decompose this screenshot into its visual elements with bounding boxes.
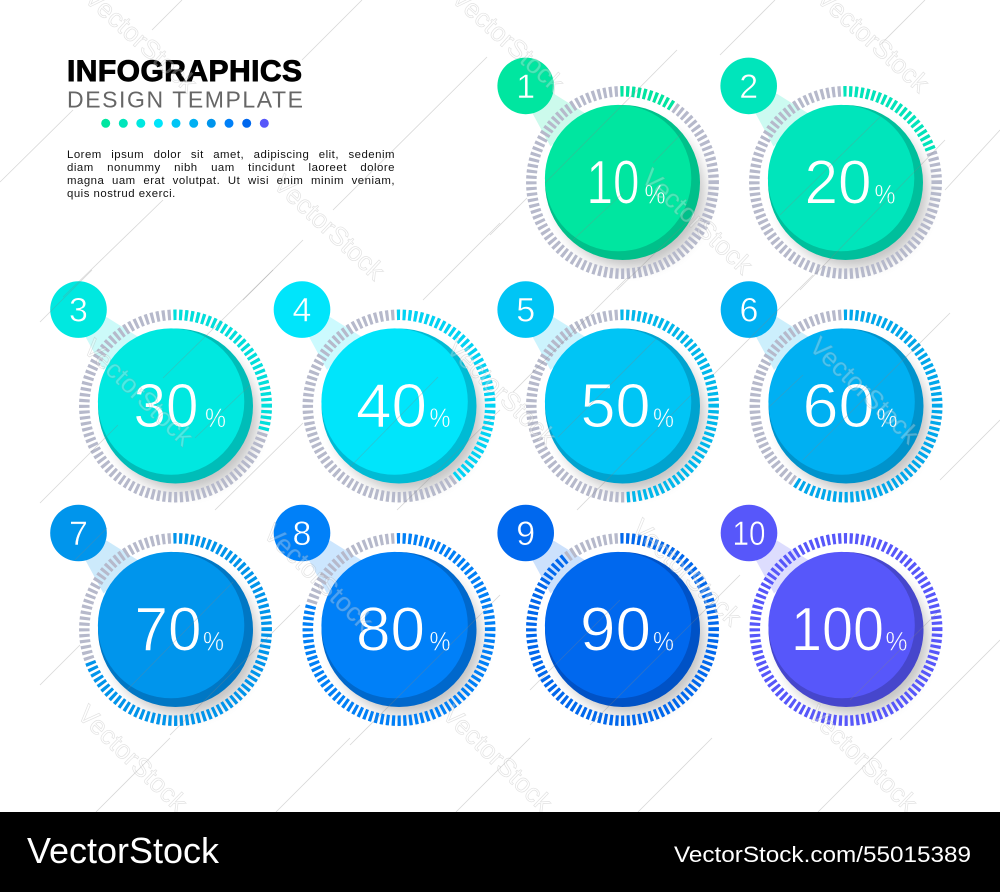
- panel: gauge 8, 80%: [274, 505, 490, 721]
- badge: 2: 2: [739, 68, 758, 106]
- value: 80%: 80: [356, 596, 425, 664]
- watermark text: VectorStock: [441, 333, 563, 452]
- badge: 8: 8: [293, 515, 311, 553]
- badge: 7: 7: [69, 515, 88, 553]
- panel: gauge 10, 100%: [721, 505, 937, 721]
- value: 10%: 10: [586, 148, 640, 218]
- badge: 9: 9: [516, 515, 535, 553]
- watermark text: VectorStock: [636, 162, 759, 281]
- colour dots row: [101, 119, 269, 128]
- panel: gauge 7, 70%: [50, 505, 267, 721]
- title: INFOGRAPHICS: INFOGRAPHICS: [67, 55, 302, 88]
- watermark text: VectorStock: [437, 699, 559, 818]
- panel: gauge 9, 90%: [497, 505, 714, 721]
- value: 20%: 20: [804, 148, 872, 218]
- value: 20%: %: [874, 180, 896, 210]
- value: 50%: 50: [580, 372, 650, 441]
- value: 90%: %: [653, 626, 674, 656]
- panel: gauge 2, 20%: [720, 58, 937, 274]
- badge: 1: 1: [516, 68, 535, 106]
- footer image id: VectorStock.com/55015389: [674, 842, 971, 867]
- value: 100%: %: [886, 626, 908, 656]
- badge: 7: [50, 505, 107, 561]
- text block: lorem ipsum: Lorem ipsum dolor sit amet, adipiscing elit, sedenim: [67, 148, 395, 160]
- badge: 3: [50, 281, 107, 338]
- value: 50%: %: [653, 403, 674, 433]
- footer logo: VectorStock: [27, 830, 220, 871]
- watermark text: [72, 0, 936, 818]
- value: 90%: 90: [580, 596, 651, 664]
- value: 70%: 70: [134, 596, 202, 664]
- watermark text: VectorStock: [78, 333, 200, 452]
- badge: 10: 10: [732, 515, 766, 553]
- panel: gauge 6, 60%: [721, 281, 937, 497]
- value: 40%: 40: [356, 372, 427, 441]
- badge: 4: [274, 281, 330, 338]
- text block: lorem ipsum: [67, 148, 395, 200]
- panel: gauge 3, 30%: [50, 281, 267, 497]
- value: 30%: 30: [134, 372, 198, 441]
- value: 10%: %: [644, 180, 666, 210]
- value: 60%: %: [876, 403, 898, 433]
- watermark text: VectorStock: [258, 518, 380, 637]
- badge: 5: 5: [516, 292, 535, 330]
- value: 70%: %: [203, 626, 224, 656]
- badge: 9: [497, 505, 554, 561]
- panel: gauge 5, 50%: [497, 281, 714, 497]
- text block: lorem ipsum: diam nonummy nibh uam tincidunt laoreet dolore: [67, 162, 395, 174]
- value: 100%: 100: [791, 596, 884, 664]
- badge: 8: [274, 505, 330, 561]
- watermark text: VectorStock: [72, 699, 194, 818]
- watermark text: VectorStock: [804, 331, 926, 450]
- panel: gauge 1, 10%: [497, 58, 714, 274]
- badge: 6: 6: [740, 292, 758, 330]
- badge: 10: [721, 505, 777, 561]
- badge: 2: [720, 58, 777, 114]
- badge: 6: [721, 281, 777, 338]
- watermark text: VectorStock: [802, 699, 924, 818]
- text block: lorem ipsum: quis nostrud exerci.: [67, 188, 176, 200]
- subtitle: design template: DESIGN TEMPLATE: [67, 86, 303, 112]
- footer bar: [0, 812, 1000, 892]
- value: 30%: %: [205, 403, 226, 433]
- text block: lorem ipsum: magna uam erat volutpat. Ut wisi enim minim veniam,: [67, 175, 395, 187]
- watermark text: VectorStock: [626, 513, 748, 632]
- badge: 3: 3: [69, 292, 88, 330]
- badge: 5: [497, 281, 554, 338]
- value: 40%: %: [430, 403, 450, 433]
- panel: gauge 4, 40%: [274, 281, 490, 497]
- value: 60%: 60: [802, 372, 874, 441]
- badge: 4: 4: [293, 292, 311, 330]
- badge: 1: [497, 58, 554, 114]
- watermark text: VectorStock: [268, 168, 391, 287]
- value: 80%: %: [430, 626, 450, 656]
